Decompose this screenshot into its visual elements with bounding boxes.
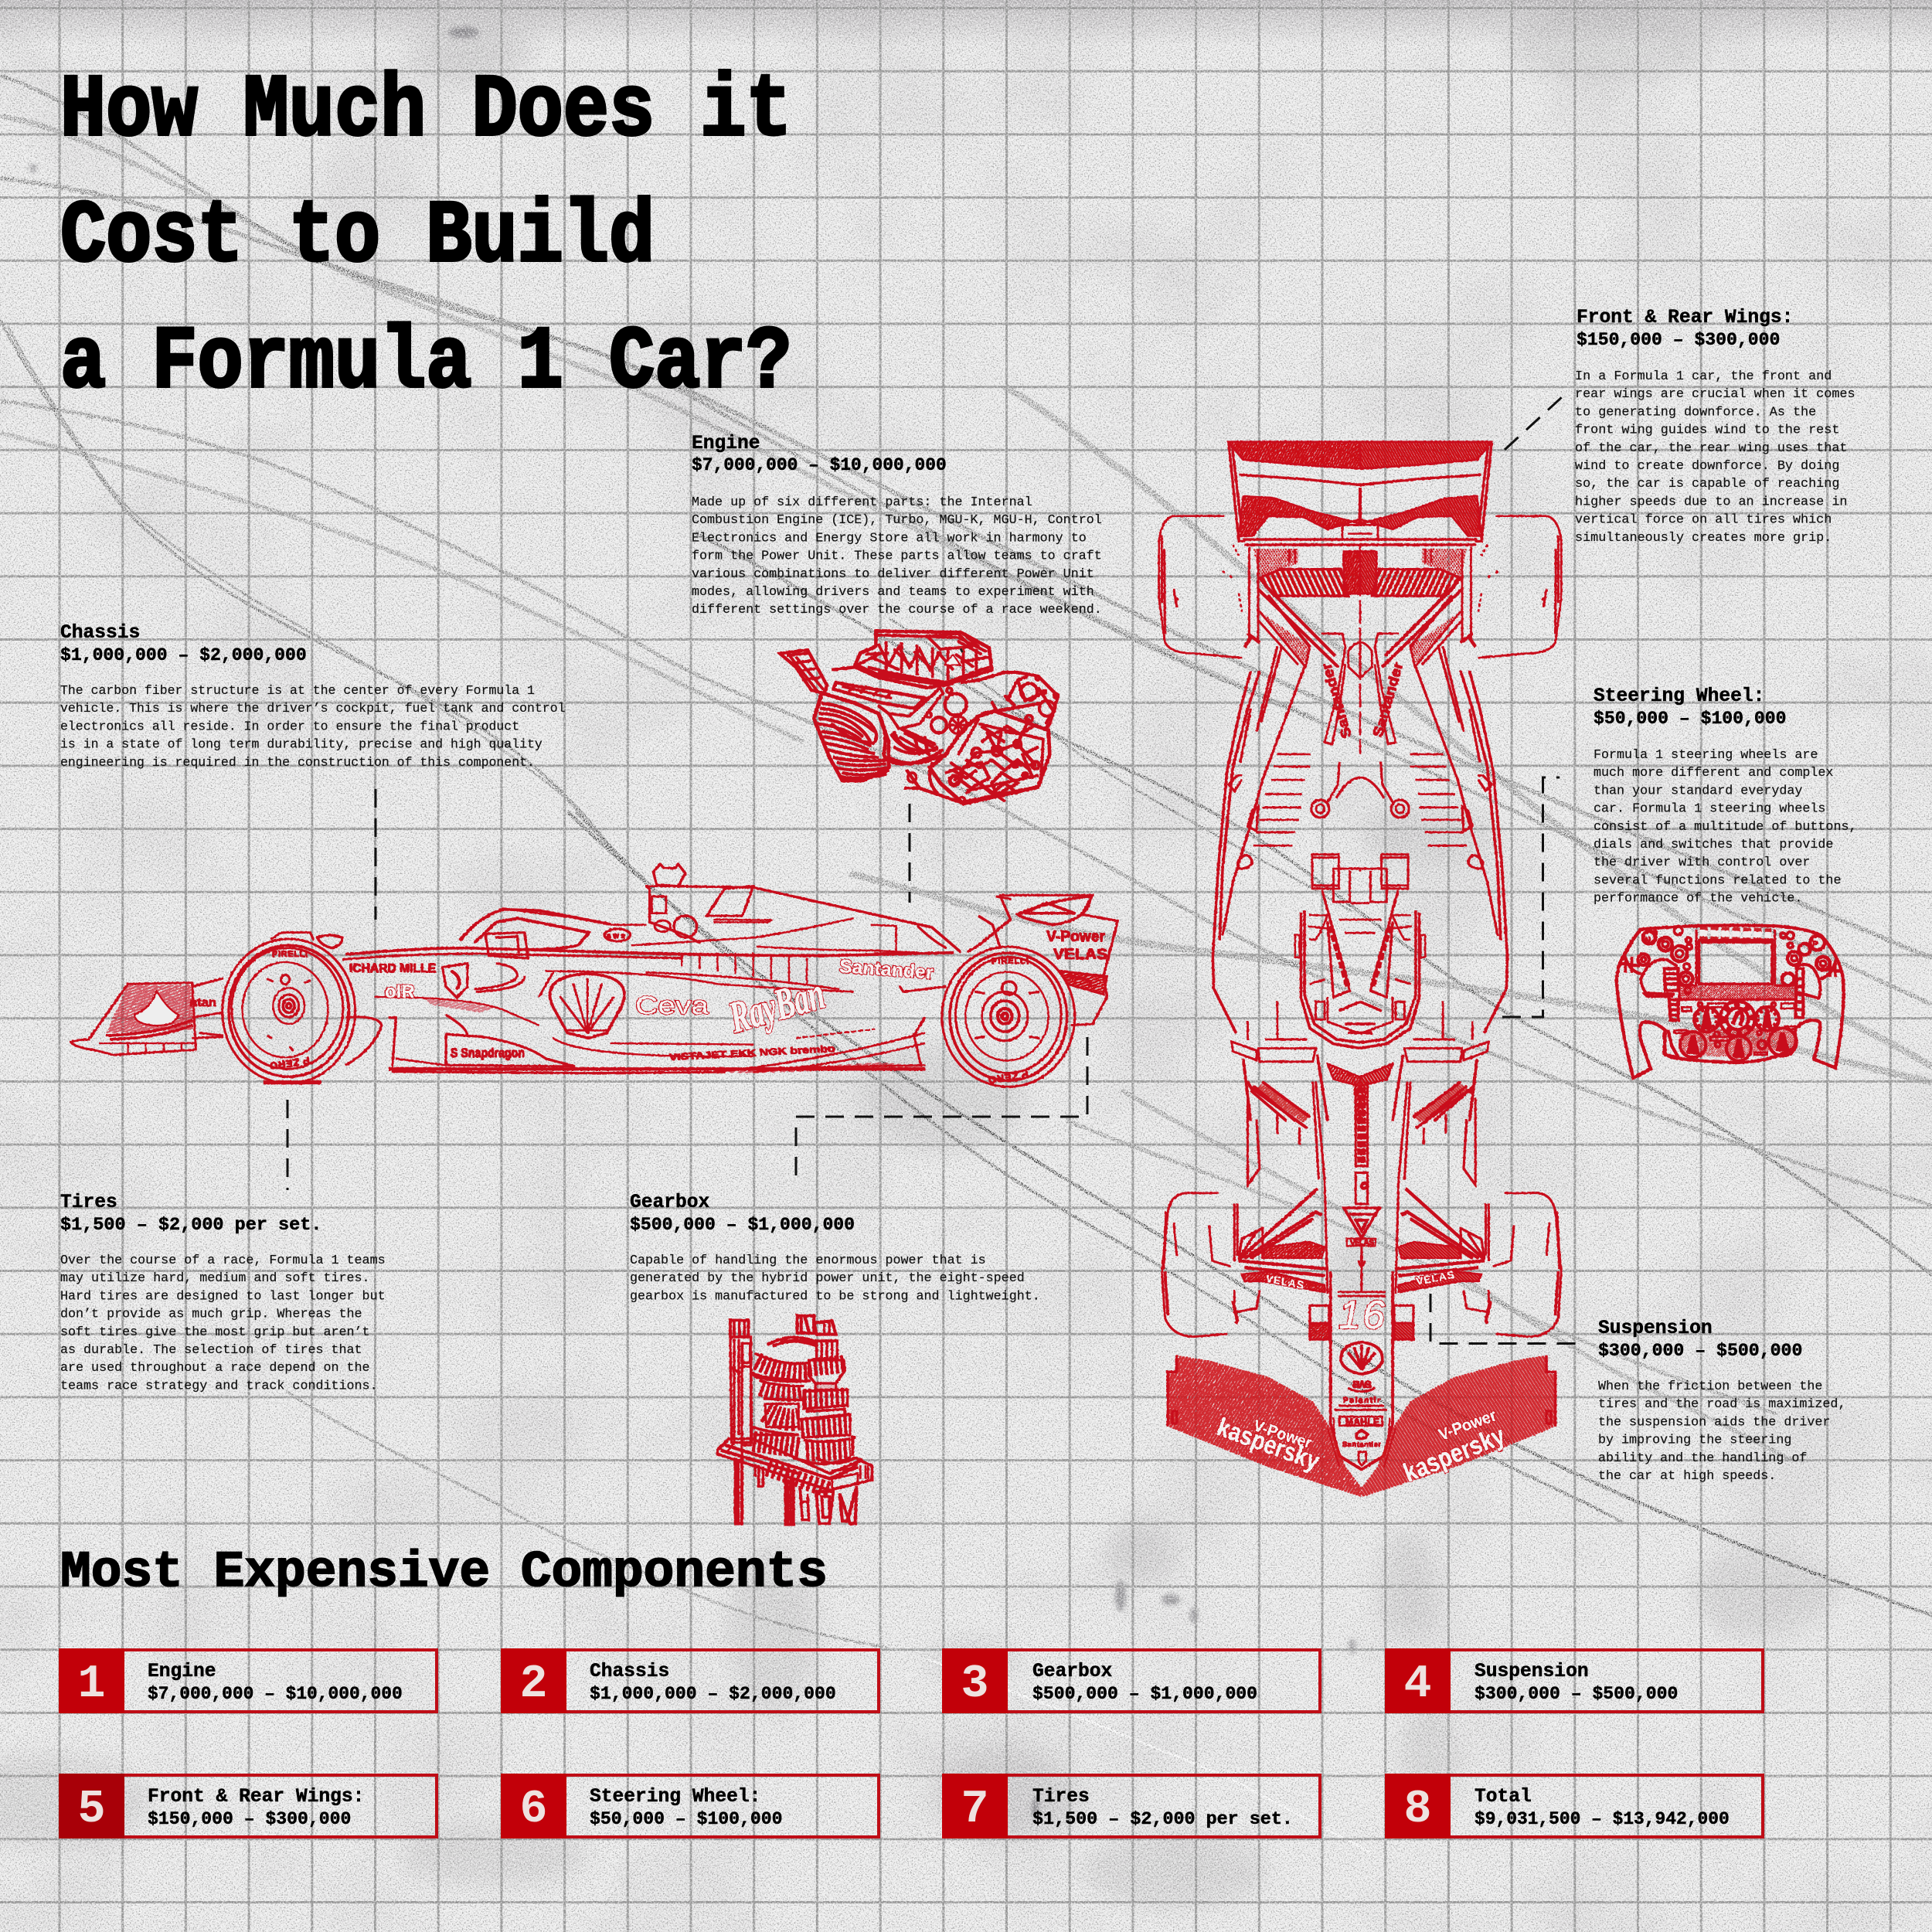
- text block: chassis: engineering is required in the construction of this component.: [60, 755, 535, 770]
- text block: front and rear wings: front wing guides wind to the rest: [1575, 423, 1839, 438]
- card 5: wings: Front & Rear Wings:: [148, 1787, 364, 1808]
- text block: chassis: The carbon fiber structure is at the center of every Formula 1: [60, 683, 535, 698]
- illustration: Ferrari top view: V-Power: [1251, 1417, 1314, 1452]
- text block: engine: [692, 434, 1102, 617]
- card 7: tires: 7: [961, 1784, 989, 1836]
- illustration: Ferrari side view: S Snapdragon: [451, 1046, 525, 1060]
- card 8: total: 8: [1403, 1784, 1432, 1836]
- text block: front and rear wings: so, the car is capable of reaching: [1575, 477, 1839, 492]
- text block: front and rear wings: to generating downforce. As the: [1575, 405, 1816, 420]
- title: How Much Does it: [60, 62, 792, 162]
- card 8: total: $9,031,500 – $13,942,000: [1475, 1809, 1730, 1829]
- illustration: Ferrari top view: aws: [1352, 1376, 1372, 1391]
- text block: steering wheel: Steering Wheel:: [1594, 686, 1764, 707]
- illustration: Ferrari top view: VELAS: [1415, 1268, 1455, 1287]
- card 6: steering wheel: $50,000 – $100,000: [590, 1809, 782, 1829]
- illustration: engine: [780, 631, 1058, 804]
- text block: chassis: $1,000,000 – $2,000,000: [60, 645, 307, 665]
- leader line: chassis: [374, 789, 377, 920]
- text block: tires: teams race strategy and track conditions.: [60, 1379, 378, 1393]
- text block: suspension: tires and the road is maximized,: [1598, 1397, 1845, 1412]
- illustration: Ferrari side view: aws: [607, 932, 625, 940]
- illustration: Ferrari top view: Santander: [1342, 1440, 1381, 1448]
- text block: front and rear wings: vertical force on all tires which: [1575, 513, 1832, 528]
- text block: tires: Tires: [60, 1192, 117, 1213]
- text block: chassis: [60, 623, 566, 770]
- text block: tires: Hard tires are designed to last longer but: [60, 1289, 386, 1304]
- illustration: gearbox: [717, 1316, 872, 1525]
- card 7: tires: [942, 1774, 1320, 1838]
- text block: suspension: by improving the steering: [1598, 1434, 1791, 1448]
- card 6: steering wheel: 6: [519, 1784, 548, 1836]
- text block: tires: [60, 1192, 386, 1393]
- text block: front and rear wings: [1575, 308, 1855, 546]
- text block: engine: $7,000,000 – $10,000,000: [692, 455, 947, 475]
- text block: front and rear wings: Front & Rear Wings:: [1577, 308, 1793, 328]
- card 4: suspension: 4: [1403, 1658, 1432, 1711]
- illustration: steering wheel: N: [1645, 936, 1651, 945]
- title: a Formula 1 Car?: [60, 314, 792, 413]
- text block: gearbox: Gearbox: [630, 1192, 710, 1213]
- text block: tires: are used throughout a race depend on the: [60, 1361, 370, 1376]
- leader line: suspension: [1430, 1294, 1576, 1343]
- illustration: Ferrari top view: [1159, 442, 1561, 1497]
- leader line: gearbox: [796, 1037, 1087, 1181]
- text block: steering wheel: Formula 1 steering wheels are: [1594, 748, 1818, 763]
- card 2: chassis: 2: [519, 1658, 548, 1711]
- text block: front and rear wings: of the car, the rear wing uses that: [1575, 441, 1847, 456]
- ranking cards: [59, 1648, 1763, 1838]
- leader line: steering wheel: [1502, 777, 1560, 1017]
- text block: tires: as durable. The selection of tires that: [60, 1343, 362, 1358]
- illustration: Ferrari side view: ICHARD MILLE: [349, 962, 436, 975]
- text block: chassis: vehicle. This is where the driver’s cockpit, fuel tank and control: [60, 701, 566, 716]
- text block: engine: Made up of six different parts: the Internal: [692, 495, 1032, 510]
- text block: front and rear wings: higher speeds due to an increase in: [1575, 495, 1847, 509]
- text block: engine: Combustion Engine (ICE), Turbo, MGU-K, MGU-H, Control: [692, 513, 1102, 528]
- card 4: suspension: $300,000 – $500,000: [1475, 1684, 1678, 1704]
- card 3: gearbox: $500,000 – $1,000,000: [1032, 1684, 1257, 1704]
- card 5: wings: [59, 1774, 437, 1838]
- card 6: steering wheel: [501, 1774, 879, 1838]
- illustration: Ferrari top view: VELAS: [1350, 1239, 1374, 1247]
- illustration: Ferrari top view: kaspersky: [1213, 1413, 1324, 1476]
- text block: steering wheel: much more different and complex: [1594, 766, 1833, 781]
- illustration: steering wheel: P: [1812, 940, 1818, 949]
- text block: front and rear wings: simultaneously creates more grip.: [1575, 531, 1832, 546]
- illustration: Ferrari top view: Santander: [1370, 660, 1406, 739]
- text block: suspension: the car at high speeds.: [1598, 1469, 1776, 1484]
- illustration: Ferrari side view: Ceva: [635, 992, 709, 1019]
- illustration: Ferrari side view: [71, 864, 1117, 1087]
- illustration: Ferrari top view: Palantir: [1343, 1396, 1380, 1405]
- text block: suspension: [1598, 1318, 1845, 1484]
- card 3: gearbox: [942, 1648, 1320, 1713]
- text block: chassis: electronics all reside. In order to ensure the final product: [60, 719, 519, 733]
- text block: chassis: Chassis: [60, 623, 140, 644]
- card 1: engine: Engine: [148, 1662, 216, 1682]
- text block: gearbox: Capable of handling the enormous power that is: [630, 1253, 986, 1268]
- text block: steering wheel: [1594, 686, 1856, 906]
- text block: steering wheel: car. Formula 1 steering wheels: [1594, 802, 1825, 817]
- text block: engine: Electronics and Energy Store all work in harmony to: [692, 531, 1087, 546]
- title: Cost to Build: [60, 188, 655, 287]
- card 2: chassis: $1,000,000 – $2,000,000: [590, 1684, 836, 1704]
- text block: tires: don’t provide as much grip. Whereas the: [60, 1308, 362, 1322]
- illustration: Ferrari side view: P ZERO: [988, 1069, 1029, 1086]
- card 7: tires: $1,500 – $2,000 per set.: [1032, 1810, 1293, 1830]
- text block: front and rear wings: In a Formula 1 car, the front and: [1575, 369, 1832, 384]
- card 1: engine: $7,000,000 – $10,000,000: [148, 1684, 403, 1704]
- text block: suspension: $300,000 – $500,000: [1598, 1341, 1802, 1361]
- illustration: Ferrari top view: V-Power: [1436, 1406, 1498, 1444]
- text block: steering wheel: dials and switches that provide: [1594, 838, 1833, 852]
- text block: steering wheel: $50,000 – $100,000: [1594, 709, 1786, 729]
- text block: gearbox: $500,000 – $1,000,000: [630, 1215, 855, 1235]
- text block: chassis: is in a state of long term durability, precise and high quality: [60, 737, 543, 752]
- leader line: wings: [1505, 396, 1563, 450]
- text block: steering wheel: performance of the vehicle.: [1594, 892, 1802, 906]
- text block: engine: form the Power Unit. These parts allow teams to craft: [692, 549, 1102, 564]
- text block: steering wheel: several functions related to the: [1594, 873, 1841, 888]
- text block: suspension: the suspension aids the driver: [1598, 1415, 1830, 1430]
- text block: tires: may utilize hard, medium and soft tires.: [60, 1271, 370, 1286]
- illustration: Ferrari top view: VELAS: [1265, 1272, 1305, 1291]
- card 8: total: Total: [1475, 1787, 1532, 1808]
- illustration: Ferrari side view: PIRELLI: [992, 957, 1029, 966]
- text block: front and rear wings: $150,000 – $300,000: [1577, 330, 1780, 350]
- illustration: Ferrari top view: Santander: [1318, 662, 1355, 740]
- text block: suspension: ability and the handling of: [1598, 1451, 1807, 1466]
- illustration: Ferrari side view: RayBan: [723, 968, 830, 1043]
- illustration: Ferrari top view: 16: [1338, 1293, 1385, 1338]
- illustration: Ferrari side view: VELAS: [1053, 947, 1107, 963]
- card 6: steering wheel: Steering Wheel:: [590, 1787, 760, 1808]
- illustration: Ferrari top view: kaspersky: [1400, 1420, 1509, 1488]
- pale scratch across lower cards: [927, 1659, 1371, 1852]
- illustration: Ferrari side view: ntan: [189, 996, 216, 1009]
- card 3: gearbox: Gearbox: [1032, 1662, 1113, 1682]
- card 3: gearbox: 3: [961, 1658, 989, 1711]
- card 5: wings: $150,000 – $300,000: [148, 1809, 351, 1829]
- illustration: Ferrari top view: MAHLE: [1345, 1417, 1379, 1427]
- text block: steering wheel: consist of a multitude of buttons,: [1594, 820, 1856, 835]
- leader line: tires: [286, 1100, 289, 1190]
- text block: engine: modes, allowing drivers and teams to experiment with: [692, 585, 1094, 600]
- text block: steering wheel: than your standard everyday: [1594, 784, 1802, 798]
- illustration: Ferrari side view: P ZERO: [269, 1055, 311, 1072]
- text block: gearbox: gearbox is manufactured to be strong and lightweight.: [630, 1289, 1040, 1304]
- text block: gearbox: generated by the hybrid power unit, the eight-speed: [630, 1271, 1025, 1286]
- text block: suspension: When the friction between the: [1598, 1379, 1822, 1394]
- text block: engine: Engine: [692, 434, 760, 454]
- card 4: suspension: Suspension: [1475, 1662, 1589, 1682]
- text block: engine: different settings over the course of a race weekend.: [692, 603, 1102, 617]
- card 2: chassis: [501, 1648, 879, 1713]
- text block: front and rear wings: wind to create downforce. By doing: [1575, 459, 1839, 474]
- heading: most expensive components: Most Expensive Components: [60, 1543, 828, 1601]
- text block: tires: $1,500 – $2,000 per set.: [60, 1215, 321, 1236]
- illustration: Ferrari side view: Santander: [838, 956, 934, 983]
- text block: steering wheel: the driver with control over: [1594, 855, 1810, 870]
- card 2: chassis: Chassis: [590, 1662, 669, 1682]
- text block: gearbox: [630, 1192, 1040, 1304]
- card 1: engine: [59, 1648, 437, 1713]
- card 8: total: [1385, 1774, 1763, 1838]
- leader line: engine: [909, 804, 910, 903]
- text block: front and rear wings: rear wings are crucial when it comes: [1575, 387, 1855, 402]
- title: [60, 62, 792, 413]
- illustration: Ferrari side view: PIRELLI: [272, 950, 308, 959]
- card 1: engine: 1: [77, 1658, 106, 1711]
- text block: engine: various combinations to deliver different Power Unit: [692, 567, 1094, 582]
- card 5: wings: 5: [77, 1784, 106, 1836]
- illustration: steering wheel: [1617, 925, 1844, 1078]
- illustration: Ferrari side view: V-Power: [1046, 929, 1106, 945]
- illustration: Ferrari side view: VISTAJET EKK NGK brembo: [668, 1043, 835, 1063]
- text block: tires: soft tires give the most grip but aren’t: [60, 1325, 370, 1340]
- text block: suspension: Suspension: [1598, 1318, 1713, 1339]
- card 4: suspension: [1385, 1648, 1763, 1713]
- text block: tires: Over the course of a race, Formula 1 teams: [60, 1253, 386, 1268]
- card 7: tires: Tires: [1032, 1787, 1090, 1808]
- illustration: Ferrari side view: oIR: [385, 981, 415, 1002]
